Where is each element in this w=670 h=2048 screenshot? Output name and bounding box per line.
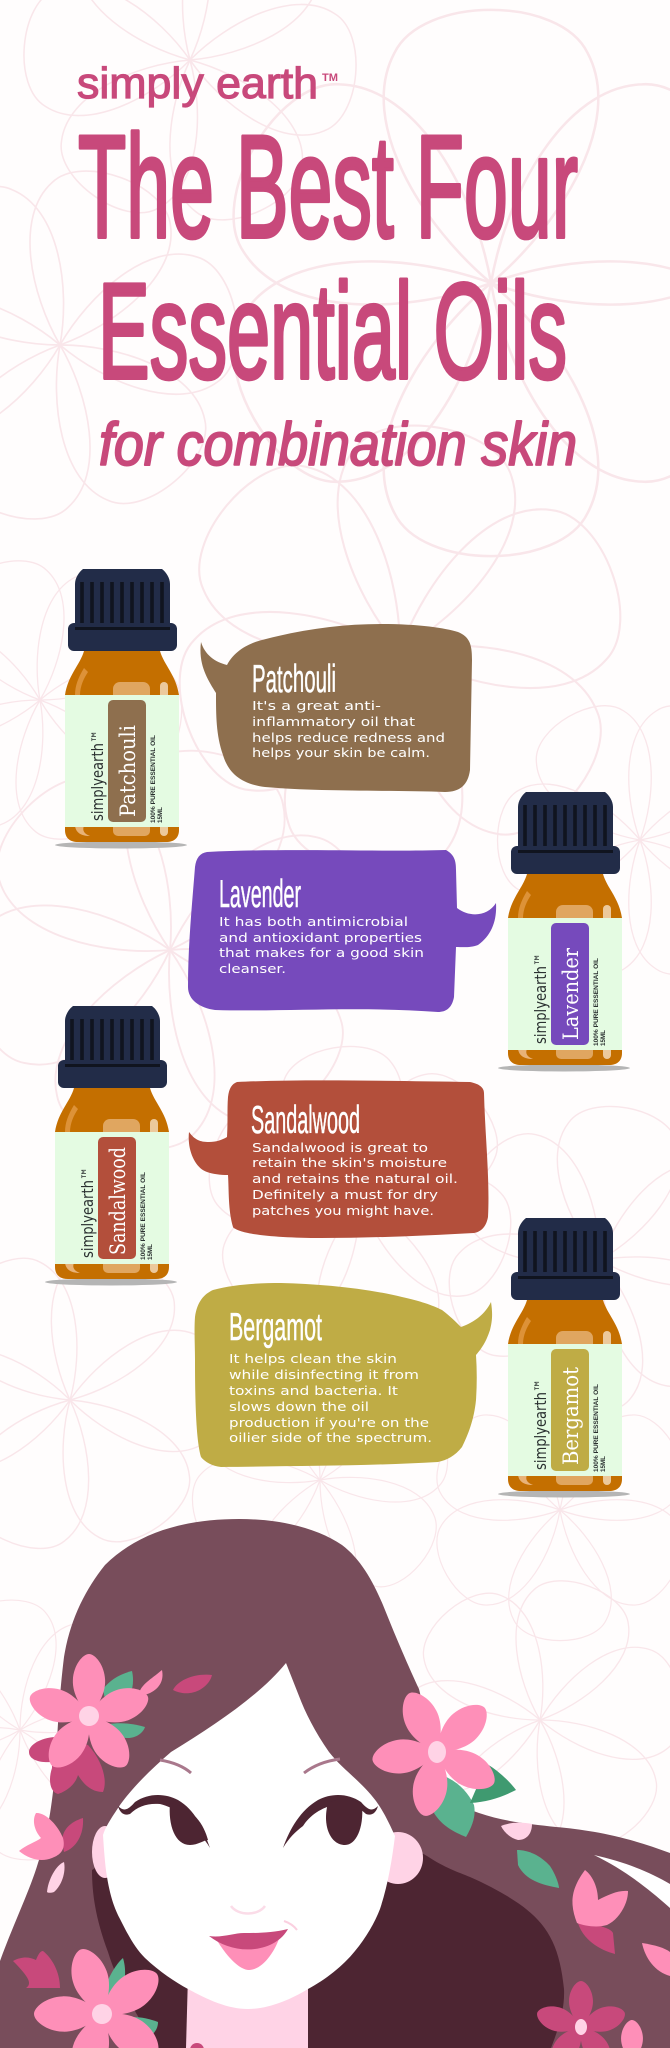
bubble: Sandalwood — [189, 1080, 488, 1238]
bubble: Patchouli: Patchouli — [252, 658, 336, 701]
hair gap — [594, 1855, 670, 1908]
mouth — [209, 1921, 297, 1970]
left eye — [118, 1795, 210, 1848]
bubble: Bergamot: production if you're on the — [229, 1415, 429, 1430]
bottle: Sandalwood: simplyearth™ — [78, 1167, 97, 1258]
logo: simply earth: simply earth — [77, 59, 318, 108]
face — [103, 1663, 395, 2009]
bubble: Lavender — [188, 850, 496, 1012]
dark leaf — [470, 1764, 516, 1803]
bottle: Patchouli: 100% PURE ESSENTIAL OIL — [151, 735, 157, 823]
bubble: Bergamot: Bergamot — [229, 1306, 322, 1349]
right eye — [283, 1795, 378, 1848]
bubble: Lavender: It has both antimicrobial — [219, 914, 408, 929]
dark flower behind — [29, 1737, 105, 1794]
bubble: Lavender: cleanser. — [219, 961, 286, 976]
bottle: Sandalwood — [45, 1006, 177, 1286]
bubble: Bergamot — [195, 1283, 492, 1467]
bubble: Patchouli: It's a great anti- — [252, 698, 381, 713]
bottle: Bergamot: Bergamot — [559, 1366, 583, 1465]
bottle: Sandalwood: 100% PURE ESSENTIAL OIL — [141, 1172, 147, 1260]
bottle: Lavender: Lavender — [559, 947, 583, 1040]
bubble: Patchouli: helps reduce redness and — [252, 730, 445, 745]
bubble: Patchouli: inflammatory oil that — [252, 714, 415, 729]
bubble: Lavender: and antioxidant properties — [219, 930, 422, 945]
eyebrows — [160, 1759, 340, 1773]
bubble: Bergamot: It helps clean the skin — [229, 1351, 397, 1366]
bubble: Bergamot: oilier side of the spectrum. — [229, 1430, 432, 1445]
bottle: Lavender: 100% PURE ESSENTIAL OIL — [594, 958, 600, 1046]
neck — [186, 1975, 308, 2048]
bottle: Patchouli: Patchouli — [116, 725, 140, 817]
bottle: Patchouli — [55, 569, 187, 848]
bubble: Sandalwood: Sandalwood is great to — [252, 1140, 428, 1155]
hair — [0, 1519, 670, 2048]
leaves — [103, 1671, 559, 2035]
bubble: Bergamot: toxins and bacteria. It — [229, 1383, 398, 1398]
left ear — [92, 1826, 118, 1878]
petals and tulips — [13, 1670, 670, 2048]
illustration: woman with flowers in her hair — [0, 1519, 670, 2048]
dark under-hair — [92, 1800, 564, 2048]
bottle: Lavender: 15ML — [601, 1030, 607, 1046]
bottle: Lavender: simplyearth™ — [531, 953, 550, 1044]
bubble: Patchouli: helps your skin be calm. — [252, 745, 430, 760]
logo: simply earth: TM — [322, 72, 338, 84]
bottle: Bergamot: 100% PURE ESSENTIAL OIL — [594, 1384, 600, 1472]
bottle: Bergamot — [498, 1218, 630, 1498]
subtitle: for combination skin — [99, 411, 577, 478]
flower centres — [79, 1706, 587, 2035]
nose — [231, 1906, 265, 1914]
bottle: Lavender — [498, 792, 630, 1072]
bubble: Sandalwood: and retains the natural oil. — [252, 1171, 458, 1186]
bubble: Lavender: that makes for a good skin — [219, 945, 424, 960]
bottle: Bergamot: 15ML — [601, 1456, 607, 1472]
bubble: Sandalwood: patches you might have. — [252, 1203, 434, 1218]
main flowers — [25, 1654, 153, 1776]
bubble: Patchouli — [200, 624, 472, 792]
right ear — [373, 1832, 423, 1884]
title — [78, 105, 578, 407]
bottle: Bergamot: simplyearth™ — [531, 1379, 550, 1470]
bubble: Bergamot: while disinfecting it from — [229, 1367, 419, 1382]
bubble: Bergamot: slows down the oil — [229, 1399, 369, 1414]
bottle: Sandalwood: 15ML — [148, 1244, 154, 1260]
bottle: Sandalwood: Sandalwood — [106, 1147, 130, 1255]
bubble: Sandalwood: Sandalwood — [251, 1099, 360, 1142]
bubble: Lavender: Lavender — [219, 873, 301, 916]
bottle: Patchouli: 15ML — [158, 807, 164, 823]
bottle: Patchouli: simplyearth™ — [88, 730, 107, 821]
bubble: Sandalwood: retain the skin's moisture — [252, 1155, 447, 1170]
bubble: Sandalwood: Definitely a must for dry — [252, 1187, 439, 1202]
